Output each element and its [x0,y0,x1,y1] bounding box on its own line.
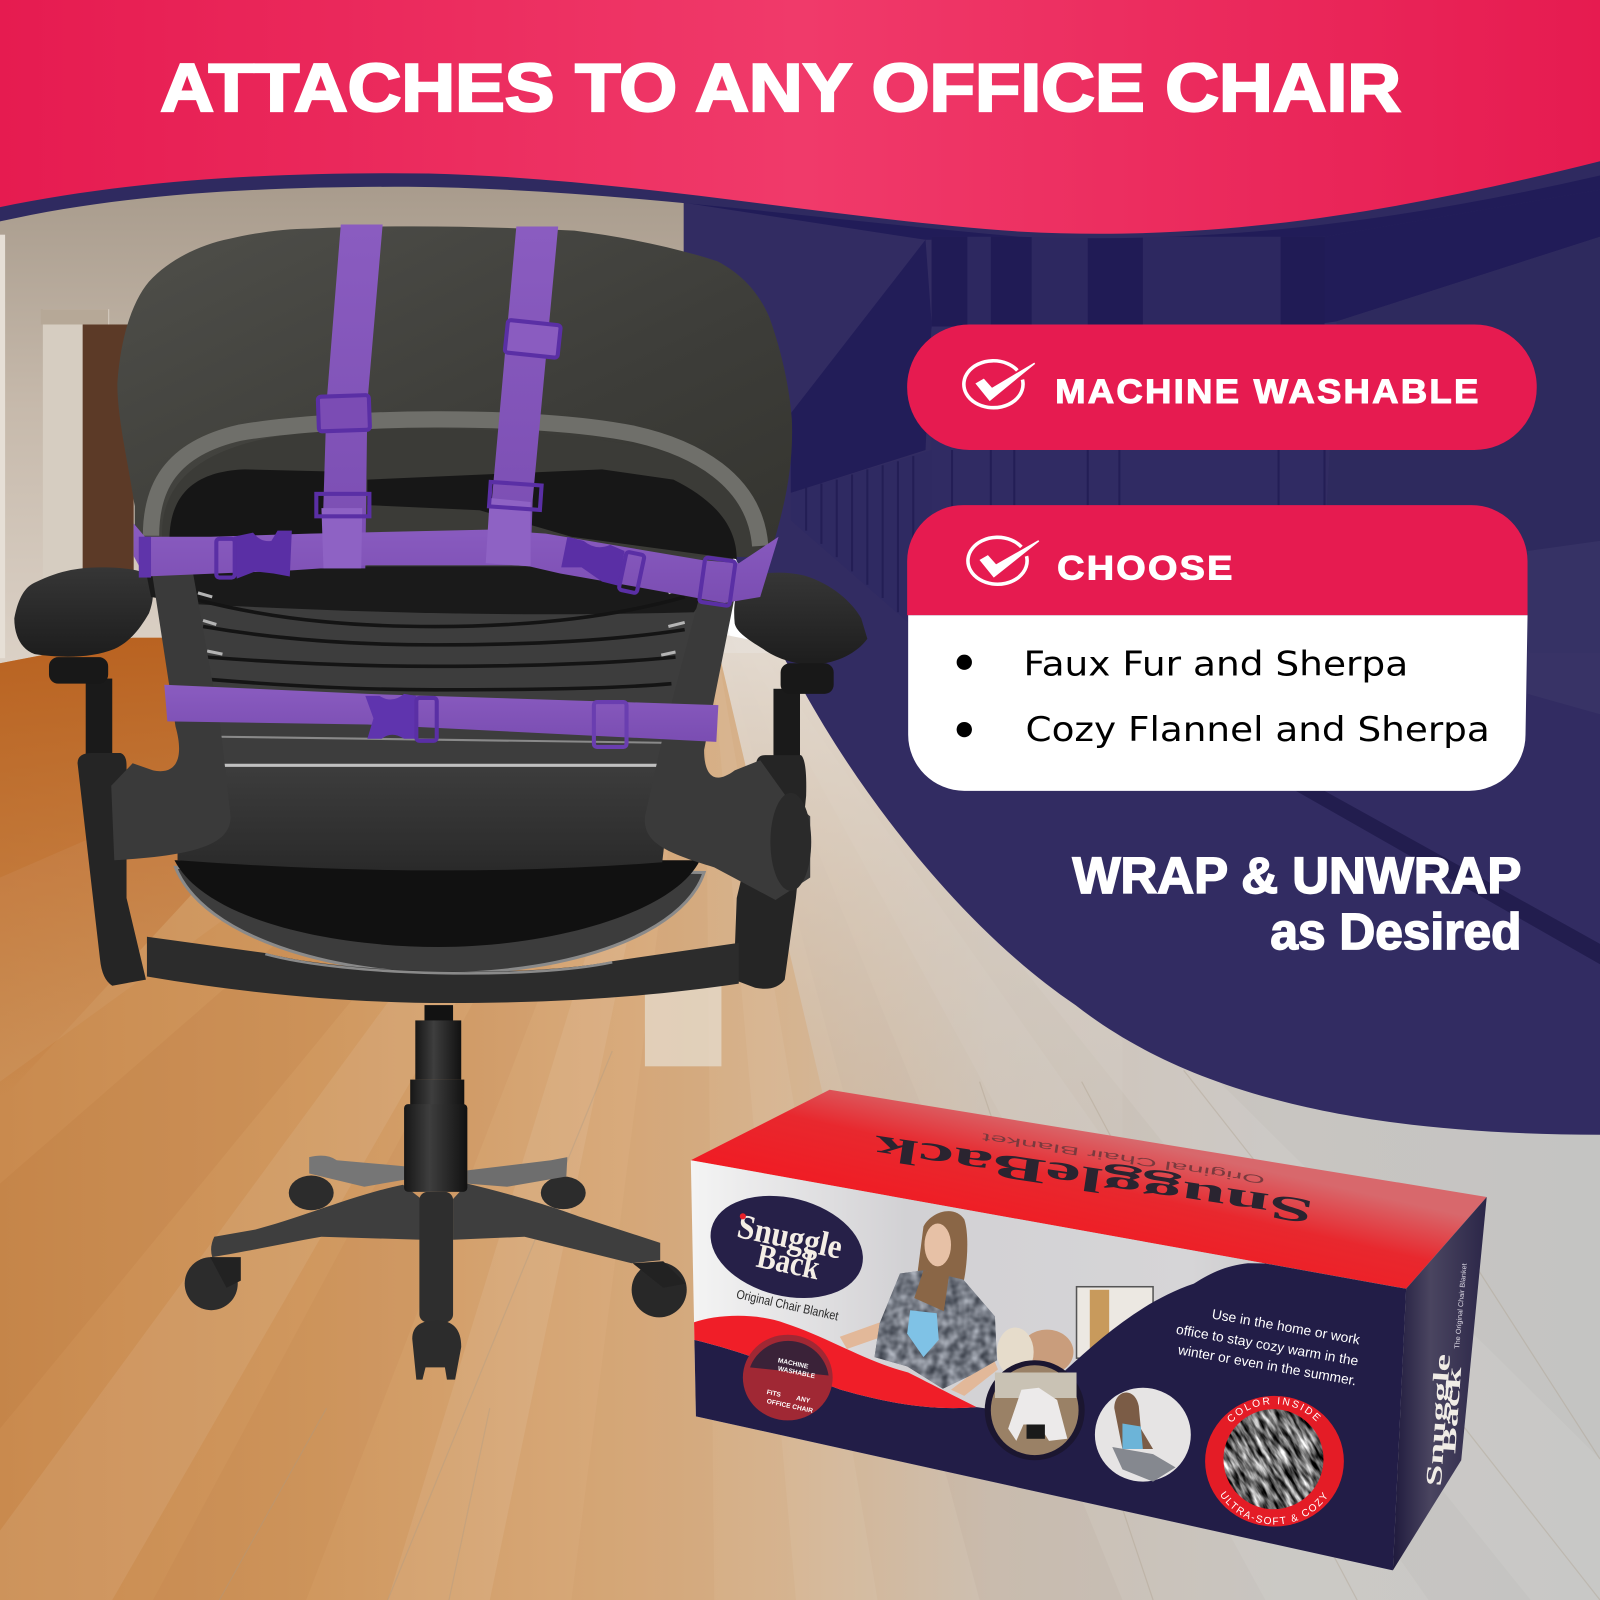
badge: FITS [766,1389,782,1399]
lower horizontal strap [164,685,718,742]
list: fabric options: Faux Fur and Sherpa [1023,645,1408,684]
buckle left [234,531,292,579]
chair base [185,1005,687,1380]
red wave [691,1316,977,1408]
heading: choose: CHOOSE [1057,550,1235,588]
box side face [1393,1197,1487,1570]
badge [743,1335,833,1420]
box front face [690,1160,1406,1570]
caption: wrap and unwrap [1072,847,1521,960]
room backdrop [1077,1287,1153,1358]
arm pads [14,567,867,694]
badge: ANY [796,1395,811,1405]
woman [840,1211,1005,1396]
box blurb: office to stay cozy warm in the [1175,1322,1360,1369]
label: machine washable: MACHINE WASHABLE [1055,373,1481,411]
icon: check mark [968,537,1039,584]
box blurb [1175,1307,1361,1388]
photo: chair with blanket [985,1360,1085,1460]
mesh back panel [111,551,811,900]
list: fabric options: Cozy Flannel and Sherpa [1026,710,1490,749]
photo: woman seated [1095,1388,1191,1482]
box top face: Original Chair Blanket [979,1130,1266,1185]
wooden floor [0,571,1600,1600]
panel: choose card [907,505,1528,791]
buckle lower [365,694,416,739]
box side face: Snuggle [1421,1353,1455,1487]
badge: color inside: ULTRA-SOFT & COZY [1221,1491,1327,1525]
logo oval [700,1181,874,1313]
product box [690,1090,1487,1570]
buckle right [561,537,624,586]
box blurb: winter or even in the summer. [1176,1342,1358,1388]
caption: wrap and unwrap: as Desired [1270,903,1521,960]
side column left with wing [111,566,231,860]
caption: wrap and unwrap: WRAP & UNWRAP [1072,847,1521,904]
right slider [699,557,736,606]
sliders [318,395,370,431]
box top face [691,1090,1487,1289]
list: fabric options [957,645,1490,749]
logo oval: Snuggle [734,1206,846,1267]
box blurb: Use in the home or work [1211,1307,1361,1347]
badge: OFFICE CHAIR [766,1398,814,1415]
box side face: The Original Chair Blanket [1453,1263,1469,1349]
title: ATTACHES TO ANY OFFICE CHAIR [160,51,1401,126]
badge: color inside [1205,1396,1344,1526]
box top face: SnuggleBack [870,1127,1315,1232]
background wall and door [0,184,714,673]
tagline: Original Chair Blanket [735,1286,840,1323]
badge: WASHABLE [777,1366,816,1380]
navy wave [694,1263,1429,1592]
purple straps and buckles [134,224,779,747]
logo oval: Back [753,1236,824,1287]
frame columns and posts [78,679,806,989]
icon: check mark [964,361,1035,408]
box side face: Back [1438,1365,1466,1454]
upper vertical straps [321,224,383,568]
badge: MACHINE [777,1357,809,1371]
seat [147,860,739,1003]
seat back shell [117,226,792,559]
top banner [0,0,1600,238]
upper horizontal strap [134,523,779,603]
panel: machine washable pill [907,324,1537,450]
office chair [14,224,867,1380]
badge: color inside: COLOR INSIDE [1228,1397,1321,1422]
lower back panel [178,763,673,870]
navy shape with building backdrop [684,122,1600,1135]
bottom bar [147,937,739,1003]
side column right with wing [645,587,810,900]
